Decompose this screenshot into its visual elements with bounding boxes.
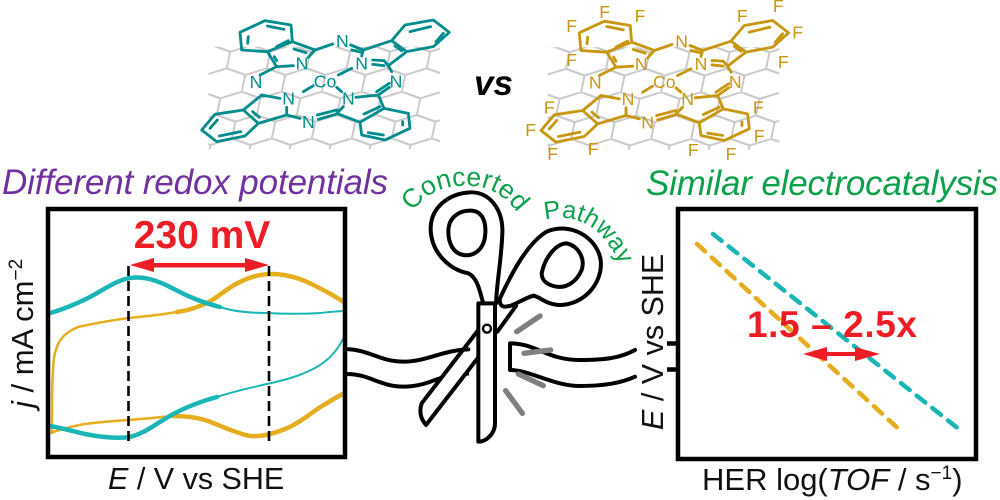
molecule: fluorinated cobalt phthalocyanine on graphene: N <box>675 31 688 51</box>
curved label: pathway: Pathway <box>544 201 632 260</box>
molecule: cobalt phthalocyanine on graphene: N <box>336 31 349 51</box>
molecule: fluorinated cobalt phthalocyanine on graphene: N <box>681 89 694 109</box>
molecule: cobalt phthalocyanine on graphene: Co <box>314 71 336 91</box>
scissors cutting a ribbon <box>347 192 635 442</box>
molecule: fluorinated cobalt phthalocyanine on graphene: F <box>753 97 764 117</box>
value: 1.5 – 2.5x: 1.5 – 2.5x <box>747 304 917 345</box>
molecule: cobalt phthalocyanine on graphene: N <box>282 89 295 109</box>
line: teal dashed <box>713 234 960 430</box>
molecule: fluorinated cobalt phthalocyanine on graphene: N <box>641 112 654 132</box>
axis label: E vs SHE, right: E / V vs SHE <box>636 254 670 430</box>
scissor blade: vertical <box>478 303 495 442</box>
molecule: fluorinated cobalt phthalocyanine on graphene: F <box>599 2 610 22</box>
scissor handle: right <box>500 229 601 307</box>
molecule: fluorinated cobalt phthalocyanine on graphene: F <box>525 120 536 140</box>
molecule: cobalt phthalocyanine on graphene: N <box>302 112 315 132</box>
molecule: fluorinated cobalt phthalocyanine on graphene: F <box>544 97 555 117</box>
value: 230 mV: 230 mV <box>134 214 270 257</box>
arrow: TOF difference <box>803 347 880 361</box>
axis label: E vs SHE, left: E / V vs SHE <box>108 462 284 496</box>
molecule: fluorinated cobalt phthalocyanine on graphene: Co <box>653 72 676 92</box>
molecule: fluorinated cobalt phthalocyanine on graphene: F <box>566 16 577 36</box>
arrow: 230 mV separation <box>130 258 269 272</box>
heading: different redox potentials: Different redox potentials <box>2 163 388 202</box>
axis label: HER TOF: ) <box>952 462 963 497</box>
axis label: j: j / mA cm <box>5 281 40 408</box>
molecule: cobalt phthalocyanine on graphene: N <box>355 54 368 74</box>
panel: cyclic voltammogram <box>48 209 345 457</box>
molecule: fluorinated cobalt phthalocyanine on graphene: F <box>778 52 789 72</box>
frame <box>678 209 976 459</box>
axis label: j: −2 <box>6 259 27 281</box>
molecule: cobalt phthalocyanine on graphene: N <box>250 72 262 92</box>
molecule: fluorinated cobalt phthalocyanine on graphene <box>525 0 803 164</box>
molecule: fluorinated cobalt phthalocyanine on graphene: F <box>688 140 699 160</box>
cut sparks <box>506 316 551 413</box>
molecule: fluorinated cobalt phthalocyanine on graphene: F <box>792 22 803 42</box>
molecule: cobalt phthalocyanine on graphene: N <box>342 89 355 109</box>
molecule: cobalt phthalocyanine on graphene <box>202 20 449 149</box>
scissor pivot <box>483 325 491 333</box>
axis label: HER TOF: HER log(TOF / s <box>702 462 931 497</box>
vs label: vs <box>474 64 513 103</box>
molecule: fluorinated cobalt phthalocyanine on graphene: N <box>729 72 742 92</box>
molecule: cobalt phthalocyanine on graphene: N <box>390 71 402 91</box>
molecule: fluorinated cobalt phthalocyanine on graphene: N <box>589 72 602 92</box>
curved label: concerted: Concerted <box>403 172 531 212</box>
molecule: fluorinated cobalt phthalocyanine on graphene: F <box>635 6 646 26</box>
molecule: fluorinated cobalt phthalocyanine on graphene: F <box>566 50 577 70</box>
molecule: fluorinated cobalt phthalocyanine on graphene: N <box>635 54 648 74</box>
curve: teal voltammogram <box>50 278 345 438</box>
axis label: HER TOF: −1 <box>931 463 952 484</box>
scissor blade: diagonal <box>420 306 516 425</box>
panel: Tafel plot <box>667 209 976 459</box>
curve: gold voltammogram <box>50 274 345 436</box>
molecule: fluorinated cobalt phthalocyanine on graphene: F <box>726 144 737 164</box>
axis ticks <box>667 344 678 370</box>
molecule: fluorinated cobalt phthalocyanine on graphene: F <box>737 6 748 26</box>
molecule: fluorinated cobalt phthalocyanine on graphene: F <box>588 139 599 159</box>
molecule: fluorinated cobalt phthalocyanine on graphene: F <box>754 126 765 146</box>
line: gold dashed <box>697 244 902 432</box>
molecule: fluorinated cobalt phthalocyanine on graphene: F <box>547 144 558 164</box>
scissor handle: left <box>431 192 502 303</box>
dashed guide lines <box>128 266 269 446</box>
molecule: cobalt phthalocyanine on graphene: N <box>296 54 308 74</box>
heading: similar electrocatalysis: Similar electrocatalysis <box>646 164 998 203</box>
molecule: fluorinated cobalt phthalocyanine on graphene: N <box>695 54 707 74</box>
molecule: fluorinated cobalt phthalocyanine on graphene: N <box>622 89 634 109</box>
ribbon: left part <box>347 349 468 387</box>
frame <box>48 209 345 457</box>
ribbon: right part <box>510 343 635 386</box>
